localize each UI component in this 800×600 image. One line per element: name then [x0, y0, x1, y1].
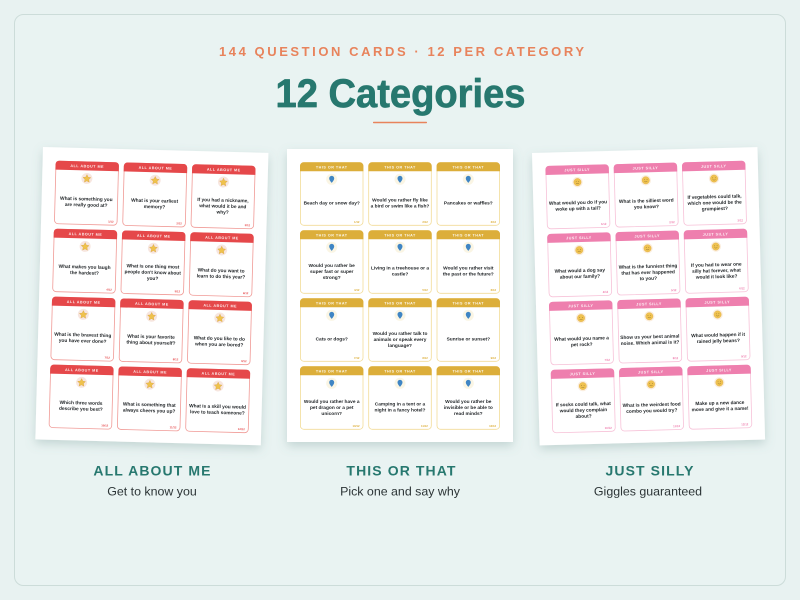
card: this or that 10 — [300, 366, 363, 429]
card: all about me 10: 10/12 — [101, 423, 109, 428]
card: this or that 4: 4/12 — [354, 288, 360, 292]
card: this or that 8: THIS OR THAT — [384, 301, 416, 305]
card: this or that 12 — [437, 366, 500, 429]
caption: this or that: Pick one and say why — [340, 484, 461, 498]
card: all about me 11: What is something that — [123, 401, 176, 409]
card: all about me 5: people don't know about — [125, 269, 181, 277]
card: just silly 2: you know? — [634, 204, 659, 211]
card: just silly 7: 7/12 — [604, 358, 610, 362]
card: this or that 11: 11/12 — [421, 424, 428, 428]
card: this or that 1: Beach day or snow day? — [304, 200, 360, 206]
card: all about me 9: What do you like to do — [194, 335, 245, 343]
card: just silly 3: JUST SILLY — [701, 164, 727, 169]
card: just silly 3: If vegetables could talk, — [687, 194, 742, 201]
card: this or that 10: pet dragon or a pet — [310, 405, 354, 411]
card: this or that 5 — [368, 230, 432, 293]
card: just silly 11: 11/12 — [673, 424, 680, 428]
card: this or that 8: animals or speak every — [374, 337, 427, 343]
card: all about me 5: ALL ABOUT ME — [137, 234, 171, 239]
card: this or that 6: THIS OR THAT — [453, 233, 484, 237]
card: this or that 5: Living in a treehouse or a — [371, 265, 429, 271]
card: just silly 8: noise. Which animal is it? — [621, 340, 679, 347]
card: all about me 5: What is one thing most — [126, 263, 180, 271]
card: just silly 6 — [684, 229, 749, 293]
card: this or that 3 — [437, 162, 500, 225]
card: just silly 9: rained jelly beans? — [697, 338, 740, 345]
card: this or that 10: unicorn? — [321, 411, 342, 417]
card: just silly 8: 8/12 — [673, 356, 679, 360]
caption: just silly: JUST SILLY — [605, 462, 695, 478]
card: this or that 2: Would you rather fly like — [372, 197, 428, 203]
card: just silly 4: about our family? — [560, 274, 600, 281]
card: just silly 4: JUST SILLY — [566, 236, 592, 240]
card: all about me 4: ALL ABOUT ME — [69, 232, 102, 237]
card: this or that 12: read minds? — [454, 411, 483, 417]
card: just silly 12: move and give it a name! — [691, 406, 749, 413]
card: all about me 6 — [189, 232, 254, 297]
caption: this or that — [340, 462, 461, 498]
card: this or that 2: a bird or swim like a fish? — [371, 203, 429, 209]
card: all about me 9: 9/12 — [241, 359, 247, 363]
card: all about me 12 — [185, 368, 250, 433]
card: this or that 9: THIS OR THAT — [453, 301, 484, 305]
caption: all about me: ALL ABOUT ME — [93, 462, 212, 478]
card: all about me 4: the hardest? — [70, 270, 99, 277]
card: this or that 9: 9/12 — [491, 356, 497, 360]
caption: all about me: Get to know you — [107, 484, 197, 498]
card: all about me 10: describe you best? — [59, 406, 103, 413]
card: this or that 1: THIS OR THAT — [316, 165, 348, 169]
card: all about me 1: 1/12 — [108, 220, 114, 224]
card: just silly 5 — [615, 230, 680, 295]
card: this or that 8: language? — [388, 343, 412, 349]
card: all about me 8: What is your favorite — [127, 334, 175, 341]
card: all about me 11: always cheers you up? — [123, 407, 176, 415]
card: just silly 7: JUST SILLY — [568, 304, 594, 308]
title underline — [373, 122, 427, 123]
card: just silly 2: What is the silliest word — [619, 198, 674, 205]
card: all about me 3: ALL ABOUT ME — [207, 168, 241, 172]
card: this or that 10: THIS OR THAT — [316, 369, 348, 373]
card: just silly 8 — [617, 298, 682, 363]
card: all about me 3: 3/12 — [245, 223, 251, 227]
card: this or that 4: Would you rather be — [309, 263, 355, 269]
card: all about me 1 — [54, 161, 119, 225]
card: this or that 8 — [368, 298, 432, 361]
card: just silly 3: grumpiest? — [702, 206, 728, 213]
card: this or that 11: Camping in a tent or a — [375, 401, 426, 407]
card: this or that 10: Would you rather have a — [304, 399, 360, 405]
card: this or that 3: THIS OR THAT — [453, 165, 484, 169]
card: all about me 9: ALL ABOUT ME — [203, 304, 237, 308]
card: just silly 12: Make up a new dance — [695, 400, 745, 407]
card: all about me 12: 12/12 — [238, 427, 245, 431]
card: just silly 1: woke up with a tail? — [554, 206, 601, 213]
card: all about me 12: love to teach someone? — [190, 409, 245, 417]
card: all about me 7: you have ever done? — [59, 338, 107, 345]
card: just silly 10: JUST SILLY — [570, 372, 595, 376]
card: all about me 5: you? — [147, 276, 158, 282]
card: this or that 11: night in a fancy hotel? — [375, 407, 426, 413]
card: all about me 1: are really good at? — [65, 202, 108, 209]
card: this or that 5: 5/12 — [422, 288, 428, 292]
card: just silly 11 — [619, 366, 684, 431]
card: just silly 4: 4/12 — [603, 290, 609, 294]
card: this or that 9: Sunrise or sunset? — [447, 336, 490, 342]
card: all about me 4 — [52, 229, 117, 293]
card: this or that 7: 7/12 — [354, 356, 360, 360]
card: just silly 6: If you had to wear one — [691, 262, 742, 269]
card: just silly 12: JUST SILLY — [706, 368, 732, 373]
card: just silly 2: JUST SILLY — [633, 166, 658, 171]
card: just silly 1: What would you do if you — [549, 199, 607, 207]
card: all about me 4: What makes you laugh — [58, 264, 111, 271]
card: just silly 6: JUST SILLY — [703, 232, 728, 237]
card: just silly 12 — [687, 365, 752, 429]
card: just silly 9: What would happen if it — [691, 332, 746, 339]
card: just silly 12: 12/12 — [741, 422, 749, 426]
card: all about me 3: why? — [215, 210, 229, 216]
card: just silly 5: that has ever happened — [621, 269, 675, 277]
card: all about me 12: ALL ABOUT ME — [202, 372, 235, 376]
card: just silly 11: What is the weirdest food — [623, 401, 681, 409]
card: just silly 6: would it look like? — [695, 274, 738, 281]
card: just silly 1: JUST SILLY — [564, 168, 590, 172]
card: just silly 9: 9/12 — [741, 354, 747, 358]
card: just silly 3: 3/12 — [737, 218, 743, 222]
card: just silly 10: 10/12 — [605, 426, 612, 430]
card: all about me 3: what would it be and — [198, 203, 247, 210]
card: all about me 6: 6/12 — [243, 291, 249, 295]
card: just silly 4 — [547, 232, 612, 297]
card: all about me 2: What is your earliest — [131, 198, 179, 205]
card: just silly 11: combo you would try? — [626, 408, 678, 415]
card: this or that 7: Cats or dogs? — [316, 336, 348, 342]
panel: all about me sheet — [35, 147, 268, 445]
card: just silly 10: If socks could talk, what — [556, 401, 611, 408]
card: just silly 11: JUST SILLY — [638, 370, 664, 375]
card: all about me 8: 8/12 — [173, 357, 179, 361]
card: just silly 5: JUST SILLY — [634, 234, 660, 239]
card: all about me 6: learn to do this year? — [197, 273, 245, 281]
card: this or that 11 — [368, 366, 432, 429]
card: just silly 9: JUST SILLY — [704, 300, 730, 305]
card: this or that 3: Pancakes or waffles? — [444, 200, 493, 206]
card: just silly 3 — [682, 161, 747, 225]
card: all about me 11: 11/12 — [170, 425, 177, 429]
card: all about me 1: ALL ABOUT ME — [70, 164, 104, 169]
title: 12 Categories — [276, 72, 526, 116]
card: this or that 4: strong? — [323, 275, 341, 281]
card: this or that 8: Would you rather talk to — [373, 331, 427, 337]
card: this or that 4: THIS OR THAT — [316, 233, 348, 237]
card: all about me 12: What is a skill you would — [189, 403, 246, 411]
card: all about me 10: Which three words — [59, 400, 103, 407]
card: this or that 5: castle? — [392, 271, 408, 277]
card: just silly 7: pet rock? — [571, 342, 593, 348]
card: all about me 1: What is something you — [60, 196, 113, 203]
card: all about me 8 — [119, 298, 184, 363]
card: all about me 10 — [49, 365, 114, 429]
card: all about me 3: If you had a nickname, — [197, 197, 249, 204]
card: just silly 2: 2/12 — [669, 220, 675, 224]
card: all about me 9: when you are bored? — [194, 341, 243, 349]
card: this or that 4: super fast or super — [310, 269, 354, 275]
card: just silly 10: about? — [576, 414, 592, 420]
card: this or that 3: 3/12 — [491, 220, 497, 224]
card: just silly 5: to you? — [640, 276, 657, 282]
card: all about me 5: 5/12 — [175, 289, 181, 293]
panel: just silly sheet — [532, 147, 765, 445]
card: this or that 10: 10/12 — [352, 424, 360, 428]
card: just silly 6: silly hat forever, what — [692, 268, 741, 275]
card: all about me 2: ALL ABOUT ME — [139, 166, 172, 171]
card: just silly 7 — [549, 300, 614, 365]
card: this or that 2: 2/12 — [422, 220, 428, 224]
card: all about me 7 — [50, 297, 115, 361]
card: all about me 4: 4/12 — [106, 288, 112, 292]
card: just silly 8: JUST SILLY — [636, 302, 662, 307]
card: all about me 7: ALL ABOUT ME — [67, 300, 101, 305]
card: this or that 6: Would you rather visit — [443, 265, 494, 271]
card: just silly 10: would they complain — [559, 407, 607, 414]
card: this or that 12: Would you rather be — [445, 399, 492, 405]
card: all about me 8: thing about yourself? — [126, 340, 176, 347]
card: all about me 6: ALL ABOUT ME — [205, 236, 239, 240]
card: this or that 6: 6/12 — [491, 288, 497, 292]
caption: this or that: THIS OR THAT — [346, 462, 457, 478]
card: just silly 10 — [551, 368, 616, 433]
card: just silly 5: What is the funniest thing — [619, 263, 677, 271]
card: just silly 2 — [614, 163, 679, 227]
caption: all about me — [93, 462, 212, 498]
card: just silly 5: 5/12 — [671, 288, 677, 292]
card: all about me 7: What is the bravest thing — [54, 332, 111, 339]
card: just silly 6: 6/12 — [739, 286, 745, 290]
card: just silly 3: which one would be the — [687, 200, 742, 207]
card: this or that 5: THIS OR THAT — [384, 233, 416, 237]
card: all about me 5 — [120, 230, 186, 295]
card: all about me 2: memory? — [144, 204, 165, 211]
card: just silly 1: 1/12 — [601, 222, 607, 226]
card: all about me 11 — [117, 366, 182, 431]
caption: just silly — [594, 462, 702, 498]
card: all about me 8: ALL ABOUT ME — [135, 302, 169, 307]
card: this or that 12: THIS OR THAT — [453, 369, 484, 373]
card: this or that 11: THIS OR THAT — [384, 369, 416, 373]
card: all about me 10: ALL ABOUT ME — [65, 368, 99, 373]
card: this or that 1: 1/12 — [354, 220, 360, 224]
card: this or that 8: 8/12 — [422, 356, 428, 360]
card: just silly 7: What would you name a — [554, 335, 609, 343]
card: this or that 2: THIS OR THAT — [384, 165, 416, 169]
card: all about me 11: ALL ABOUT ME — [133, 370, 167, 375]
card: this or that 9 — [437, 298, 500, 361]
caption: just silly: Giggles guaranteed — [594, 484, 702, 498]
card: this or that 7: THIS OR THAT — [316, 301, 348, 305]
panel: this or that sheet — [287, 149, 513, 442]
card: this or that 1 — [300, 162, 363, 225]
card: all about me 3 — [191, 164, 256, 229]
card: this or that 4 — [300, 230, 363, 293]
card: all about me 7: 7/12 — [105, 355, 110, 360]
card: just silly 8: Show us your best animal — [620, 334, 680, 341]
card: this or that 7 — [300, 298, 363, 361]
card: just silly 4: What would a dog say — [555, 267, 605, 275]
card: this or that 6 — [437, 230, 500, 293]
card: this or that 6: the past or the future? — [443, 271, 494, 277]
card: all about me 6: What do you want to — [198, 267, 245, 275]
eyebrow heading: 144 QUESTION CARDS · 12 PER CATEGORY — [219, 44, 587, 59]
card: just silly 1 — [545, 164, 610, 229]
card: this or that 12: 12/12 — [489, 424, 497, 428]
card: this or that 12: invisible or be able to — [444, 405, 493, 411]
card: just silly 9 — [685, 297, 750, 361]
card: all about me 9 — [187, 300, 252, 365]
card: all about me 2 — [122, 162, 187, 227]
card: all about me 2: 2/12 — [176, 221, 182, 225]
card: this or that 2 — [368, 162, 432, 225]
